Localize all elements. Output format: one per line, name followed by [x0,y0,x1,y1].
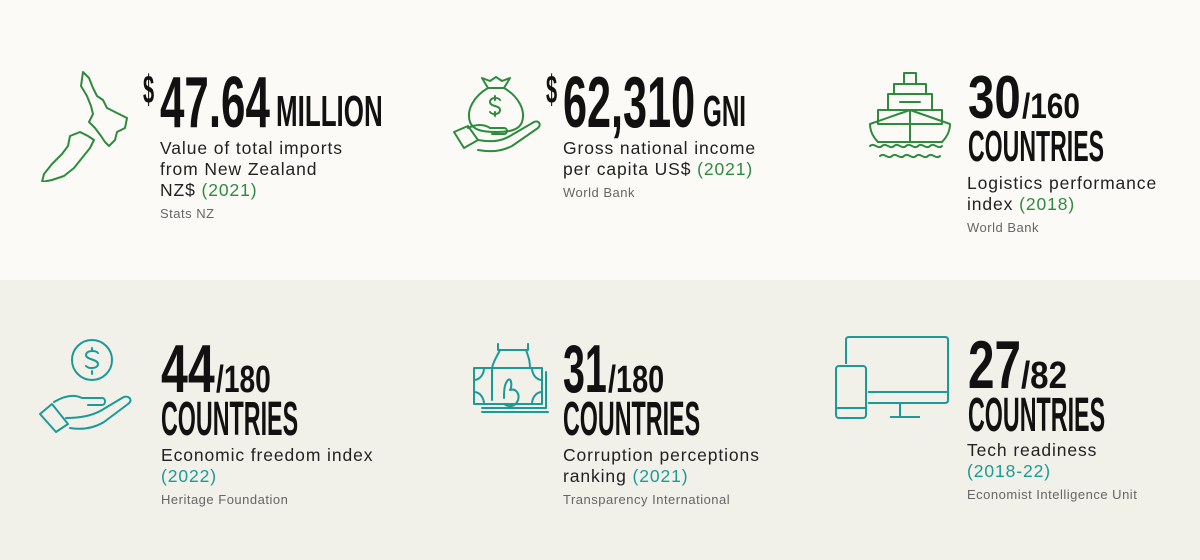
icon: money bag in hand [453,76,541,152]
text: tech readiness description [967,440,1097,481]
big number: 44/180 countries: COUNTRIES [161,393,298,446]
icon: devices [835,336,949,419]
source: World Bank: World Bank [563,185,635,200]
text: GNI description: per capita US$ (2021) [563,159,753,179]
big number: $62,310 GNI [546,63,746,143]
text: economic freedom description: (2022) [161,466,217,486]
text: economic freedom description: Economic freedom index [161,445,373,465]
icon: new zealand map [41,71,128,182]
source: Stats NZ: Stats NZ [160,206,215,221]
text: GNI description: Gross national income [563,138,756,158]
source: Heritage Foundation: Heritage Foundation [161,492,288,507]
text: GNI description [563,138,756,179]
source: Transparency International: Transparency International [563,492,730,507]
text: logistics description: index (2018) [967,194,1075,214]
text: tech readiness description: Tech readiness [967,440,1097,460]
big number: 31/180 countries: /180 [608,359,664,401]
big number: $47.64 million: $ [143,68,154,112]
big number: $62,310 GNI: 62,310 [563,63,695,143]
big number: 44/180 countries [161,331,298,446]
icon: cash bill in hand [473,343,549,413]
source: Economist Intelligence Unit: Economist Intelligence Unit [967,487,1137,502]
big number: $62,310 GNI: GNI [703,87,746,136]
big number: $47.64 million: 47.64 [160,63,270,143]
text: imports description: NZ$ (2021) [160,180,258,200]
text: imports description [160,138,343,200]
text: imports description: from New Zealand [160,159,317,179]
big number: $47.64 million [143,63,383,143]
source: World Bank: World Bank [967,220,1039,235]
big number: $47.64 million: MILLION [276,87,383,136]
text: tech readiness description: (2018-22) [967,461,1051,481]
text: economic freedom description [161,445,373,486]
big number: 44/180 countries: /180 [216,359,271,401]
big number: 31/180 countries [563,331,700,446]
big number: 31/180 countries: COUNTRIES [563,393,700,446]
stat: imports [41,71,128,182]
big number: 30/160 countries: /160 [1022,87,1080,126]
big number: 31/180 countries: 31 [563,331,607,407]
text: corruption description: ranking (2021) [563,466,688,486]
text: logistics description [967,173,1157,214]
big number: 30/160 countries: 30 [968,64,1021,131]
big number: 27/82 countries [968,327,1105,442]
big number: 30/160 countries [968,64,1104,171]
icon: coin in hand [39,339,132,433]
big number: 27/82 countries: COUNTRIES [968,389,1105,442]
big number: $62,310 GNI: $ [546,68,557,112]
text: imports description: Value of total imports [160,138,343,158]
big number: 27/82 countries: /82 [1021,355,1067,397]
big number: 27/82 countries: 27 [968,327,1021,403]
big number: 44/180 countries: 44 [161,331,215,407]
text: corruption description [563,445,760,486]
text: corruption description: Corruption perceptions [563,445,760,465]
big number: 30/160 countries: COUNTRIES [968,122,1104,171]
text: logistics description: Logistics performance [967,173,1157,193]
icon: ship [869,72,951,158]
